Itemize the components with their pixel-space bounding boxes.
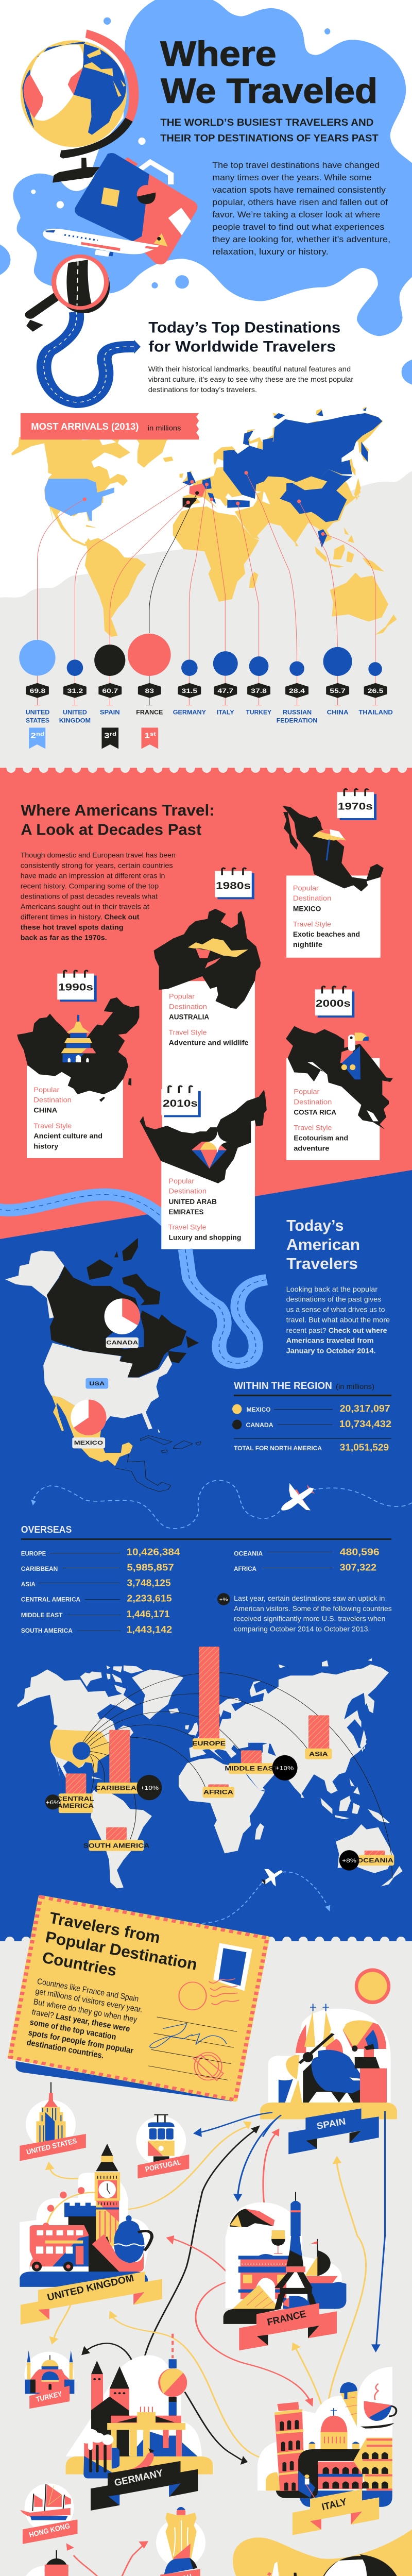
postcard heading: Countries [41, 1948, 118, 1979]
chart: arrivals balloons: KINGDOM [59, 717, 91, 724]
label: usa [85, 1378, 108, 1388]
text: 1980s destination: Travel Style [169, 1029, 207, 1037]
panel: 1990s china: history [33, 1143, 59, 1150]
text: american travelers intro: destinations of the past gives [286, 1296, 381, 1303]
table: overseas: 2,233,615 [127, 1594, 172, 1604]
map: most arrivals world map [11, 406, 397, 637]
chart: arrivals balloons: STATES [26, 717, 49, 724]
chart: arrivals balloons: 1 [144, 731, 150, 740]
illustration: magnifier and road [26, 256, 141, 402]
map: overseas travel world map: AFRICA [203, 1789, 233, 1795]
map: overseas travel world map [17, 1647, 403, 1888]
text: 1980s destination: AUSTRALIA [169, 1013, 209, 1021]
heading: where americans travel: A Look at Decades Past [21, 821, 201, 838]
city: hong kong: HONG KONG [28, 2521, 71, 2539]
table: within the region: TOTAL FOR NORTH AMERICA [234, 1445, 322, 1452]
postcard body text [26, 1977, 143, 2060]
panel: 2000s costa rica: adventure [294, 1145, 330, 1153]
table: overseas: 1,446,171 [126, 1609, 170, 1619]
table: overseas [21, 1524, 391, 1635]
panel: 1970s mexico: nightlife [293, 941, 322, 949]
text: american travelers intro [286, 1286, 390, 1355]
city: portugal [136, 2115, 189, 2178]
table: within the region: 31,051,529 [340, 1443, 389, 1453]
map: overseas travel world map: CARIBBEAN [95, 1785, 142, 1791]
decades intro paragraph: different times in history. [21, 913, 102, 921]
panel: 1970s mexico: Exotic beaches and [293, 931, 360, 939]
panel: 1970s mexico: Popular [293, 885, 319, 892]
table: overseas: 1,443,142 [126, 1625, 172, 1635]
panel: 2000s costa rica: Ecotourism and [294, 1134, 348, 1142]
road: light blue winding [185, 1249, 267, 1363]
decades intro paragraph: recent history. Comparing some of the top [21, 883, 159, 890]
text: american travelers intro: recent past? [286, 1327, 327, 1334]
chart: arrivals balloons: 69.8 [30, 687, 45, 694]
table: overseas: MIDDLE EAST [21, 1612, 63, 1619]
road across coral section [0, 1195, 168, 1223]
city: france [224, 2192, 346, 2350]
title: Where [160, 34, 277, 73]
panel: 2010s uae: Travel Style [168, 1224, 207, 1231]
panel: 2000s costa rica: 2000s [316, 998, 351, 1009]
intro paragraph: people travel to find out what experiences [212, 222, 384, 231]
panel: 1980s australia: 1980s [216, 880, 251, 891]
decades intro paragraph: Though domestic and European travel has been [21, 852, 176, 859]
chart: arrivals balloons: CHINA [327, 709, 349, 716]
heading: where americans travel [21, 801, 215, 838]
map: overseas travel world map: CENTRAL [57, 1795, 94, 1802]
map: overseas travel world map: EUROPE [192, 1740, 226, 1747]
postcard body text: get millions of visitors every year. [35, 1987, 143, 2014]
table: within the region: 10,734,432 [339, 1419, 391, 1430]
table: overseas: OCEANIA [234, 1550, 263, 1557]
heading: today's american travelers: Today’s [286, 1216, 344, 1234]
city: germany [66, 2334, 213, 2511]
panel: 2010s uae: 2010s [163, 1098, 198, 1109]
city: china [18, 2550, 152, 2576]
intro paragraph [212, 160, 390, 256]
city: united kingdom: UNITED KINGDOM [46, 2273, 135, 2303]
table: overseas: 10,426,384 [126, 1547, 180, 1557]
subtitle [160, 116, 379, 144]
illustration: airplane [43, 229, 159, 257]
map: overseas travel world map: +10% [141, 1785, 159, 1791]
table: overseas: SOUTH AMERICA [21, 1627, 73, 1634]
city: france: FRANCE [266, 2309, 307, 2328]
postcard heading: Travelers from [48, 1908, 162, 1947]
chart: arrivals balloons: 31.2 [67, 687, 83, 694]
map: overseas travel world map: OCEANIA [357, 1857, 393, 1864]
table: overseas: ASIA [21, 1581, 36, 1588]
flight path with white plane [196, 1869, 330, 1924]
city: italy [258, 2367, 396, 2535]
panel: 2000s costa rica: Travel Style [294, 1124, 332, 1132]
table: within the region [232, 1380, 391, 1453]
chart: mexico share pie: MEXICO [74, 1439, 103, 1446]
map: north america [5, 1238, 201, 1492]
chart: mexico share pie [71, 1399, 107, 1448]
chart: arrivals balloons: 83 [145, 687, 154, 694]
connector lines from countries to balloons [37, 471, 375, 666]
chart: arrivals balloons: ITALY [217, 709, 234, 716]
chart: arrivals balloons: FEDERATION [277, 717, 317, 724]
panel: 2010s uae: Destination [169, 1188, 207, 1195]
top destinations intro text: vibrant culture, it’s easy to see why these are the most popular [148, 376, 354, 383]
chart: canada share pie: CANADA [106, 1339, 138, 1346]
text: american travelers intro: January to October 2014. [286, 1347, 376, 1355]
panel: 1970s mexico: MEXICO [293, 905, 321, 913]
city: italy: ITALY [321, 2497, 348, 2513]
panel: 2010s uae: Popular [169, 1178, 194, 1185]
chart: arrivals balloons: nd [36, 731, 44, 737]
gray wave background [0, 471, 412, 768]
flight path with plane [31, 1480, 412, 1529]
decades intro paragraph: consistently strong for years, certain countries [21, 862, 173, 870]
chart: arrivals balloons: st [150, 731, 156, 737]
text: 1980s destination: Destination [169, 1003, 207, 1011]
chart: arrivals balloons: 2 [30, 731, 36, 740]
note: uptick in american visitors [217, 1593, 392, 1633]
chart: arrivals balloons: THAILAND [358, 709, 393, 716]
banner: most arrivals: MOST ARRIVALS (2013) [31, 421, 139, 432]
chart: arrivals balloons: rd [110, 731, 116, 737]
note: uptick in american visitors: comparing October 2014 to October 2013. [234, 1625, 370, 1633]
decades intro paragraph: Americans sought out in their travels at [21, 903, 149, 911]
table: overseas: 3,748,125 [127, 1578, 171, 1588]
heading: today's american travelers: American [286, 1235, 360, 1253]
text: american travelers intro: Looking back at the popular [286, 1286, 378, 1293]
panel: 2010s uae: EMIRATES [169, 1209, 203, 1216]
top destinations intro text [148, 366, 354, 394]
table: within the region: CANADA [246, 1421, 273, 1428]
city: germany: GERMANY [113, 2468, 164, 2488]
title [160, 34, 377, 110]
text: american travelers intro: us a sense of what drives us to [286, 1306, 385, 1314]
table: overseas: 480,596 [340, 1547, 380, 1557]
city: turkey: TURKEY [35, 2389, 63, 2403]
city: macau [156, 2507, 205, 2576]
map: overseas travel world map: +8% [342, 1858, 356, 1864]
postcard heading [41, 1908, 199, 1979]
chart: arrivals balloons: 26.5 [368, 687, 384, 694]
map: overseas travel world map: SOUTH AMERICA [83, 1842, 149, 1849]
city: united states: UNITED STATES [26, 2137, 78, 2156]
intro paragraph: The top travel destinations have changed [212, 160, 380, 170]
decades intro paragraph: back as far as the 1970s. [21, 934, 107, 942]
heading: today's american travelers: Travelers [286, 1255, 358, 1273]
postcard heading: Popular Destination [44, 1928, 199, 1974]
chart: canada share pie [105, 1298, 140, 1348]
heading: today's top destinations: Today’s Top Destinations [148, 319, 340, 336]
panel: 1990s china: CHINA [33, 1107, 57, 1114]
panel: 2000s costa rica: COSTA RICA [294, 1109, 336, 1116]
chart: arrivals balloons: SPAIN [100, 709, 120, 716]
table: overseas: CENTRAL AMERICA [21, 1596, 80, 1603]
map: overseas travel world map: AMERICA [57, 1803, 94, 1809]
chart: arrivals balloons: RUSSIAN [283, 709, 312, 716]
table: within the region: (in millions) [336, 1383, 374, 1391]
map: overseas travel world map: ASIA [309, 1751, 328, 1757]
chart: arrivals balloons: UNITED [63, 709, 87, 716]
panel: 2010s uae: Luxury and shopping [169, 1234, 241, 1242]
panel: 2000s costa rica [286, 987, 393, 1160]
scalloped edge of gray section [10, 1937, 412, 1946]
illustration: black globe with plane [238, 2554, 412, 2576]
heading: today's top destinations: for Worldwide Travelers [148, 338, 336, 355]
text: american travelers intro: travel. But what about the more [286, 1316, 390, 1324]
table: overseas: AFRICA [234, 1565, 256, 1572]
text: american travelers intro: Americans traveled from [286, 1337, 374, 1345]
table: overseas: EUROPE [21, 1550, 46, 1557]
city: portugal: PORTUGAL [144, 2158, 182, 2173]
city: spain [200, 1968, 397, 2236]
chart: arrivals balloons: 37.8 [251, 687, 267, 694]
intro paragraph: relaxation, luxury or history. [212, 247, 329, 256]
city: turkey [24, 2350, 74, 2409]
decades intro paragraph: have made an impression at different eras in [21, 872, 165, 880]
city: united kingdom [20, 2144, 162, 2325]
chart: arrivals balloons: 55.7 [330, 687, 346, 694]
panel: 1990s china: 1990s [58, 981, 93, 993]
postcard body text: travel? [31, 2008, 55, 2020]
postcard body text: destination countries. [26, 2038, 105, 2060]
chart: arrivals balloons: UNITED [25, 709, 50, 716]
banner: most arrivals [21, 413, 199, 439]
decades intro paragraph [21, 852, 176, 942]
panel: 1990s china: Popular [33, 1087, 59, 1094]
decades intro paragraph: these hot travel spots dating [21, 924, 124, 931]
panel: 1980s australia [153, 868, 261, 1188]
note: uptick in american visitors: +% [219, 1597, 228, 1602]
panel: 2000s costa rica: Popular [294, 1088, 319, 1096]
intro paragraph: many times over the years. While some [212, 173, 371, 182]
table: within the region: MEXICO [247, 1406, 271, 1413]
illustration: globe [21, 29, 139, 183]
panel: 1990s china: Destination [33, 1096, 72, 1104]
postcard body text: some of the top vacation [29, 2018, 117, 2042]
panel: 1970s mexico: Destination [293, 895, 331, 903]
table: overseas: CARIBBEAN [21, 1565, 58, 1572]
chart: arrivals balloons: GERMANY [173, 709, 206, 716]
table: within the region: WITHIN THE REGION [234, 1380, 332, 1391]
chart: arrivals balloons: FRANCE [136, 709, 163, 716]
panel: 1970s mexico [282, 789, 384, 958]
decades intro paragraph: Check out [105, 913, 140, 921]
chart: arrivals balloons: TURKEY [246, 709, 271, 716]
illustration: postcard [10, 1897, 267, 2102]
table: within the region: 20,317,097 [340, 1404, 390, 1414]
heading: where americans travel: Where Americans Travel: [21, 801, 215, 819]
chart: arrivals balloons: 60.7 [102, 687, 118, 694]
banner: most arrivals: in millions [148, 425, 181, 432]
text: 1980s destination [169, 993, 249, 1047]
table: overseas: OVERSEAS [21, 1524, 72, 1535]
text: 1980s destination: Adventure and wildlife [169, 1039, 249, 1047]
panel: 1970s mexico: 1970s [338, 801, 373, 812]
panel: 2010s uae: UNITED ARAB [169, 1198, 217, 1206]
map: overseas travel world map: +6% [46, 1800, 60, 1806]
arrows between countries [45, 2111, 385, 2576]
chart: arrivals balloons [19, 634, 393, 749]
table: overseas: 5,985,857 [127, 1563, 174, 1573]
decades intro paragraph: destinations of past decades reveals what [21, 893, 158, 901]
heading: today's top destinations [148, 319, 340, 355]
intro paragraph: popular, others have risen and fallen out of [212, 197, 388, 207]
scalloped edge of coral section [11, 764, 412, 773]
panel: 1990s china [17, 971, 139, 1158]
postcard body text: But where do they go when they [33, 1997, 138, 2024]
chart: arrivals balloons: 28.4 [289, 687, 305, 694]
map: overseas travel world map: MIDDLE EAST [225, 1765, 279, 1772]
panel: 2000s costa rica: Destination [294, 1098, 332, 1106]
heading: today's american travelers [286, 1216, 360, 1273]
illustration: suitcase [75, 153, 197, 264]
city: spain: SPAIN [316, 2116, 347, 2131]
intro paragraph: favor. We’re taking a closer look at where [212, 210, 380, 219]
intro paragraph: they are looking for, whether it’s adventure, [212, 234, 390, 244]
postcard body text: Last year, these were [55, 2012, 131, 2033]
postcard body text: Countries like France and Spain [37, 1977, 140, 2004]
city: united states [20, 2082, 86, 2161]
table: overseas: 307,322 [340, 1563, 376, 1573]
city: hong kong [20, 2483, 78, 2544]
top destinations intro text: With their historical landmarks, beautiful natural features and [148, 366, 351, 373]
top destinations intro text: destinations for today’s travelers. [148, 386, 257, 394]
map: overseas travel world map: +10% [276, 1765, 294, 1771]
chart: arrivals balloons: 47.7 [217, 687, 233, 694]
panel: 2010s uae [140, 1086, 267, 1249]
yellow section background [0, 2529, 412, 2576]
chart: arrivals balloons: 31.5 [181, 687, 197, 694]
panel: 1990s china: Ancient culture and [33, 1132, 102, 1140]
text: american travelers intro: Check out where [329, 1327, 387, 1334]
panel: 1990s china: Travel Style [33, 1123, 72, 1130]
postcard body text: spots for people from popular [27, 2028, 134, 2056]
hero: blue blob background [0, 0, 412, 385]
text: 1980s destination: Popular [169, 993, 195, 1001]
chart: arrivals balloons: 3 [104, 731, 110, 740]
panel: 1970s mexico: Travel Style [293, 921, 331, 928]
intro paragraph: vacation spots have remained consistently [212, 185, 386, 195]
label: usa: USA [89, 1380, 105, 1386]
